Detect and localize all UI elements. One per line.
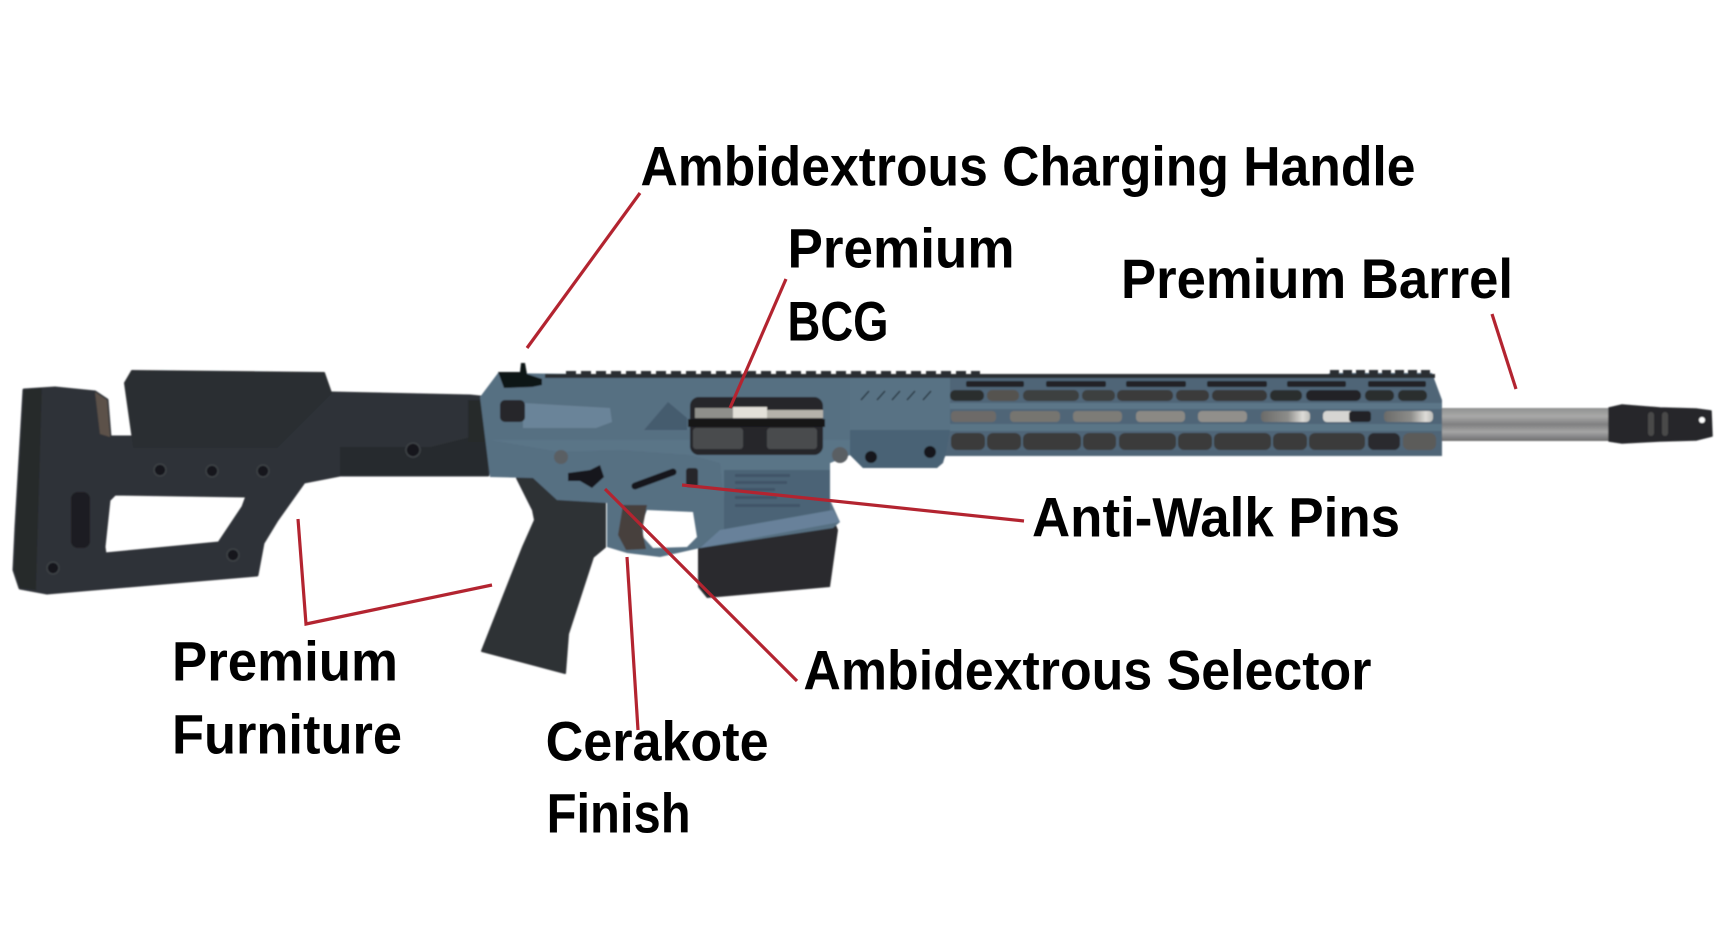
magazine: [698, 525, 838, 598]
magazine release bar: [635, 472, 673, 486]
leader line: [298, 519, 492, 624]
barrel: [1442, 408, 1612, 441]
cheek rest: [125, 371, 331, 447]
handguard screws: [865, 451, 877, 463]
forward assist housing: [644, 402, 687, 430]
leader line: [1492, 314, 1516, 389]
handguard: [850, 373, 1442, 468]
leader line: [627, 557, 638, 730]
label: Premium: [788, 217, 1014, 280]
callout: premium BCG: BCG: [788, 290, 888, 353]
selector lever: [568, 465, 604, 488]
leader line: [682, 485, 1024, 521]
callout: ambidextrous charging handle: [527, 135, 1416, 348]
label: Ambidextrous Selector: [803, 638, 1371, 701]
buffer tube end: [468, 400, 494, 442]
callout: premium barrel: [1121, 247, 1516, 389]
handguard vent marks: [861, 391, 931, 400]
muzzle brake: [1609, 405, 1712, 443]
receiver markings: [735, 474, 800, 507]
charging handle: [498, 363, 542, 388]
ejection port: [688, 397, 825, 455]
stock screws: [47, 443, 420, 574]
handguard lower slot row: [951, 433, 1436, 450]
label: Anti-Walk Pins: [1032, 486, 1400, 549]
callout: premium furniture: [172, 519, 492, 765]
label: Premium: [172, 629, 398, 692]
callout: anti-walk pins: [682, 485, 1400, 549]
receiver pins: [554, 450, 568, 464]
handguard upper slot row: [950, 390, 1427, 401]
callout: premium BCG: [730, 217, 1014, 408]
leader line: [730, 279, 786, 408]
receiver raised panel: [523, 403, 612, 428]
leader line: [605, 489, 797, 681]
label: Cerakote: [546, 709, 769, 772]
callout: cerakote finish: Finish: [547, 781, 691, 844]
callout: cerakote finish: [546, 557, 769, 844]
leader line: [527, 193, 640, 348]
buttstock and buffer tube: [14, 371, 490, 593]
top rail: [545, 372, 1435, 378]
handguard middle slot row: [951, 411, 1433, 422]
label: Ambidextrous Charging Handle: [640, 135, 1416, 198]
trigger: [618, 505, 647, 550]
callout: ambidextrous selector: [605, 489, 1371, 701]
rifle illustration: [14, 363, 1712, 673]
stock sling slot: [71, 492, 90, 548]
label: Premium Barrel: [1121, 247, 1513, 310]
rear cylinder: [500, 400, 525, 422]
pistol grip: [482, 477, 605, 673]
anti-walk pin: [686, 468, 698, 487]
handguard top slots: [966, 381, 1426, 387]
callout: premium furniture: Furniture: [172, 702, 402, 765]
lower and upper receiver: [480, 373, 850, 557]
